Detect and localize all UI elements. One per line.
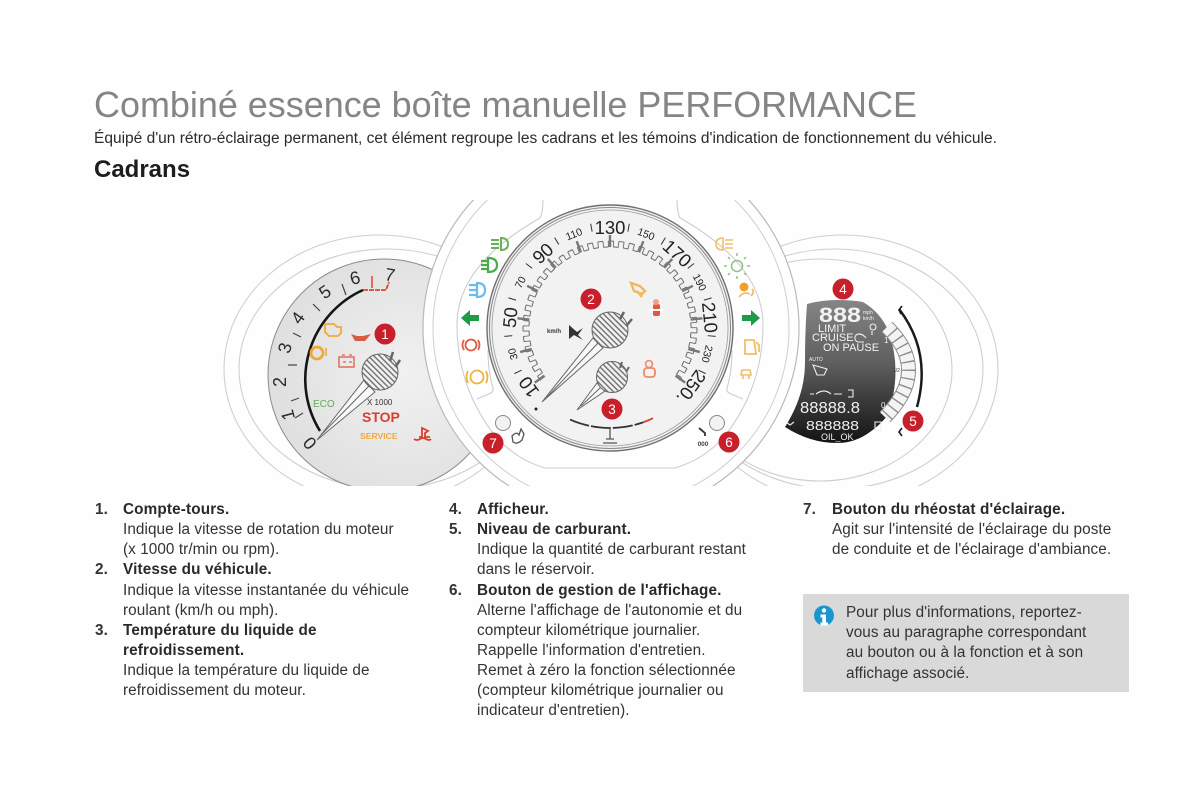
legend column 3: Agit sur l'intensité de l'éclairage du poste bbox=[832, 521, 1111, 538]
speed numerals: 230 bbox=[698, 344, 715, 364]
speed numerals: 250. bbox=[672, 366, 710, 408]
lcd digits: OIL_OK bbox=[821, 432, 854, 442]
number badges bbox=[374, 278, 924, 454]
legend column 1: refroidissement du moteur. bbox=[123, 682, 306, 699]
icon: rear fog bbox=[716, 238, 733, 250]
text: 6. bbox=[449, 582, 462, 598]
red zone bbox=[363, 282, 389, 290]
text: 2. bbox=[95, 561, 108, 578]
badge 1: 1 bbox=[381, 327, 389, 342]
badge 5: 5 bbox=[909, 414, 917, 429]
lcd digits: 0 bbox=[881, 401, 886, 410]
lcd digits: LIMIT bbox=[818, 323, 846, 335]
fuel black arc bbox=[899, 309, 922, 407]
legend column 2 bbox=[449, 501, 746, 719]
icon: parking brake bbox=[466, 370, 488, 384]
legend column 2: compteur kilométrique journalier. bbox=[477, 622, 700, 639]
speed numerals: 130 bbox=[595, 217, 625, 238]
km/h logo: km/h bbox=[547, 329, 561, 335]
temperature needle bbox=[577, 362, 629, 410]
tach numerals: 7 bbox=[383, 264, 397, 286]
info box bbox=[803, 594, 1129, 692]
legend column 1: Indique la vitesse instantanée du véhicule bbox=[123, 582, 409, 598]
icon: airbag off bbox=[739, 282, 753, 297]
left side lamps bbox=[461, 238, 508, 384]
legend column 2: Niveau de carburant. bbox=[477, 521, 631, 538]
speed numerals: 70 bbox=[513, 275, 529, 291]
icon: low beam bbox=[481, 258, 497, 272]
badge 2: 2 bbox=[587, 292, 595, 307]
speed numerals: 150 bbox=[636, 226, 656, 243]
icon: sidelights bbox=[724, 253, 750, 279]
legend column 2: Indique la quantité de carburant restant bbox=[477, 541, 746, 558]
km/h logo bbox=[547, 325, 583, 340]
lcd digits: 1/2 bbox=[893, 368, 900, 374]
tachometer rings bbox=[224, 234, 484, 486]
lcd digits: 1 bbox=[884, 336, 889, 345]
icon strip outline bbox=[457, 200, 763, 468]
minor ticks bbox=[504, 224, 716, 374]
info text: vous au paragraphe correspondant bbox=[846, 624, 1086, 641]
title: Combiné essence boîte manuelle PERFORMANCE bbox=[94, 84, 917, 125]
legend column 2: Alterne l'affichage de l'autonomie et du bbox=[477, 602, 742, 619]
right side lamps bbox=[716, 238, 760, 379]
text: 5. bbox=[449, 521, 462, 538]
info text bbox=[846, 604, 1086, 682]
heading: Cadrans: Cadrans bbox=[94, 156, 190, 183]
legend column 2: Remet à zéro la fonction sélectionnée bbox=[477, 662, 736, 679]
tach warning lamps: ECO bbox=[313, 399, 335, 410]
speed numerals: 10 bbox=[514, 373, 543, 402]
legend column 1: Indique la température du liquide de bbox=[123, 662, 370, 679]
intro text: Équipé d'un rétro-éclairage permanent, cet élément regroupe les cadrans et les témoins d'indication de fonctionnement du véhicule. bbox=[94, 130, 997, 147]
display button bbox=[698, 416, 724, 448]
black arc bbox=[305, 290, 363, 431]
legend column 1: Compte-tours. bbox=[123, 501, 229, 518]
tach numerals: 6 bbox=[348, 267, 362, 289]
badge 7 bbox=[482, 432, 504, 454]
lcd panel bbox=[785, 300, 896, 443]
fuel and display gauge bbox=[785, 300, 922, 443]
badge 1 bbox=[374, 324, 396, 344]
badge 3: 3 bbox=[608, 402, 616, 417]
inner housing ring bbox=[432, 200, 790, 486]
legend column 2: (compteur kilométrique journalier ou bbox=[477, 682, 724, 699]
legend column 1: Indique la vitesse de rotation du moteur bbox=[123, 521, 394, 538]
speedometer warning lamps bbox=[631, 283, 663, 377]
info text: au bouton ou à la fonction et à son bbox=[846, 644, 1083, 661]
instrument cluster illustration bbox=[224, 200, 998, 486]
icon: engine small bbox=[741, 370, 751, 379]
speed numerals: 170 bbox=[659, 235, 696, 271]
icon: brake bbox=[462, 340, 480, 350]
display button: 000 bbox=[698, 441, 709, 448]
temperature icon bbox=[603, 429, 617, 443]
speedometer needle bbox=[542, 312, 632, 402]
tach numerals: 1 bbox=[277, 408, 299, 422]
tachometer face bbox=[268, 258, 470, 486]
icon: right arrow bbox=[742, 310, 760, 326]
speed numerals: 110 bbox=[564, 226, 584, 243]
tach numerals bbox=[270, 264, 397, 453]
speed numerals: 210 bbox=[698, 301, 722, 334]
text: 7. bbox=[803, 501, 816, 518]
badge 5 bbox=[902, 410, 924, 432]
info text: Pour plus d'informations, reportez- bbox=[846, 604, 1082, 621]
speed numerals: 90 bbox=[528, 239, 557, 268]
tach warning lamps: X 1000 bbox=[367, 398, 393, 407]
bezel bbox=[487, 205, 733, 451]
legend column 1: Vitesse du véhicule. bbox=[123, 561, 272, 578]
lcd digits: 888888 bbox=[806, 419, 859, 433]
speed numerals bbox=[499, 217, 722, 408]
lcd digits: ON PAUSE bbox=[823, 342, 879, 354]
text: 1. bbox=[95, 501, 108, 518]
tach warning lamps: STOP bbox=[362, 409, 400, 425]
badge 4: 4 bbox=[839, 282, 847, 297]
speed numerals: 30 bbox=[506, 347, 521, 361]
tach ticks bbox=[288, 284, 346, 418]
tach numerals: 5 bbox=[315, 281, 335, 303]
speed numerals: 50 bbox=[499, 306, 522, 329]
tach numerals: 3 bbox=[274, 341, 296, 355]
temperature scale bbox=[570, 418, 653, 428]
text: 3. bbox=[95, 622, 108, 639]
lcd digits: AUTO bbox=[809, 357, 823, 363]
lcd digits: mph bbox=[863, 310, 873, 316]
major ticks bbox=[518, 235, 702, 383]
crenellated ring bbox=[523, 241, 697, 380]
tach warning lamps: SERVICE bbox=[360, 431, 398, 441]
legend column 2: Afficheur. bbox=[477, 501, 549, 518]
legend column 2: indicateur d'entretien). bbox=[477, 702, 630, 719]
legend column 1: refroidissement. bbox=[123, 642, 244, 659]
lcd digits bbox=[800, 304, 900, 442]
badge 4 bbox=[832, 278, 854, 300]
icon: left arrow bbox=[461, 310, 479, 326]
lcd digits: CRUISE bbox=[812, 332, 854, 344]
legend column 1: (x 1000 tr/min ou rpm). bbox=[123, 541, 279, 558]
tach numerals: 4 bbox=[287, 308, 309, 328]
legend column 1: roulant (km/h ou mph). bbox=[123, 602, 278, 619]
speedometer bbox=[487, 205, 733, 451]
icon: fog light bbox=[491, 238, 508, 250]
lcd digits: 888 bbox=[819, 304, 861, 327]
tach warning lamps bbox=[311, 324, 431, 441]
icon: high beam bbox=[469, 283, 485, 297]
legend column 3: de conduite et de l'éclairage d'ambiance. bbox=[832, 541, 1111, 558]
icon: fuel bbox=[745, 340, 759, 354]
tach needle bbox=[317, 352, 400, 440]
text: 4. bbox=[449, 501, 462, 518]
tachometer scale bbox=[270, 264, 431, 453]
lcd digits: km/h bbox=[863, 316, 874, 322]
fuel and display rings bbox=[738, 234, 998, 486]
tach numerals: 2 bbox=[270, 377, 290, 387]
legend column 3: Bouton du rhéostat d'éclairage. bbox=[832, 501, 1065, 518]
icon: info bbox=[814, 606, 834, 626]
cluster housing bbox=[422, 200, 800, 486]
info text: affichage associé. bbox=[846, 665, 969, 682]
badge 6: 6 bbox=[725, 435, 733, 450]
lcd pictos bbox=[786, 324, 881, 430]
badge 7: 7 bbox=[489, 436, 497, 451]
legend column 2: dans le réservoir. bbox=[477, 561, 595, 578]
lcd digits: 88888.8 bbox=[800, 400, 860, 417]
badge 3 bbox=[602, 398, 622, 420]
legend column 1: Température du liquide de bbox=[123, 622, 317, 639]
tach numerals: 0 bbox=[299, 433, 321, 453]
legend column 1 bbox=[95, 501, 409, 699]
dot marker bbox=[534, 408, 538, 410]
legend column 2: Rappelle l'information d'entretien. bbox=[477, 642, 706, 659]
legend column 3 bbox=[803, 501, 1111, 558]
fuel scale bbox=[885, 327, 909, 417]
badge 6 bbox=[718, 432, 740, 452]
rheostat button bbox=[496, 416, 524, 443]
speed numerals: 190 bbox=[690, 272, 708, 293]
legend column 2: Bouton de gestion de l'affichage. bbox=[477, 582, 722, 598]
badge 2 bbox=[580, 288, 602, 310]
